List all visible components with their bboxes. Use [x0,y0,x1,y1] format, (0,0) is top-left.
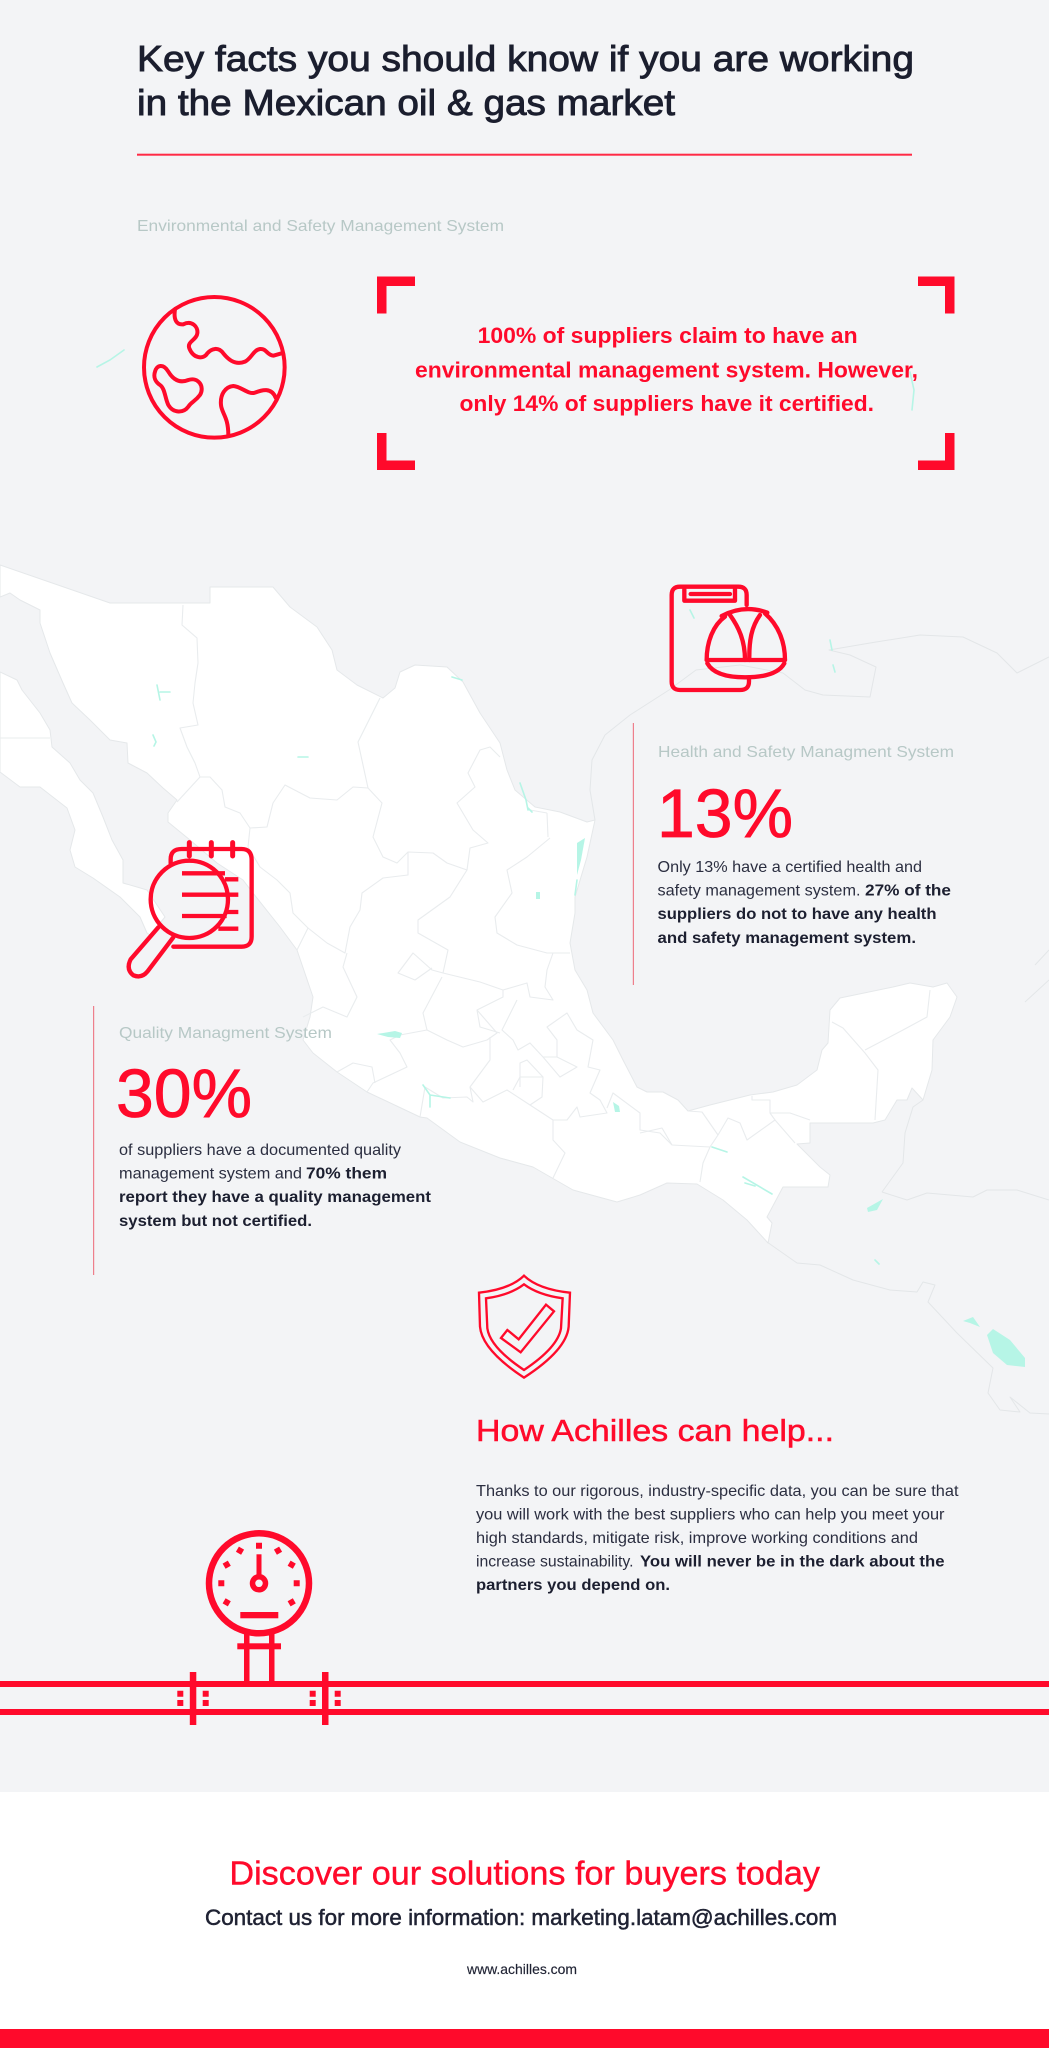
panel body: Only 13% have a certified health and [658,859,922,876]
text block: how achilles can help: increase sustainability. [476,1554,634,1570]
coastlines outside Mexico [590,635,1049,1414]
panel body [658,859,951,947]
panel body: and safety management system. [658,930,916,947]
panel label: Health and Safety Managment System [658,744,954,761]
panel body: management system and [119,1166,302,1182]
map of Mexico [0,350,1049,1414]
panel body: 70% them [306,1166,387,1182]
statistic 13%: 13% [657,775,793,852]
panel body [119,1142,432,1230]
callout text: 100% of suppliers claim to have an [478,323,858,348]
footer background [0,1792,1049,2029]
section label: environmental: Environmental and Safety Management System [137,218,504,235]
panel: quality [93,1006,432,1275]
callout text: environmental management system. However, [415,358,918,382]
icon: globe [144,297,285,438]
text block: how achilles can help: you will work with the best suppliers who can help you meet your [476,1506,945,1524]
footer contact: Contact us for more information: marketing.latam@achilles.com [205,1905,837,1930]
icon: notepad with magnifier [129,843,252,976]
gauge dial [209,1533,309,1633]
footer website: www.achilles.com [466,1961,577,1977]
title: Key facts you should know if you are working [137,38,914,79]
footer bar [0,2029,1049,2048]
text block: how achilles can help: You will never be in the dark about the [640,1554,945,1570]
panel body: suppliers do not to have any health [658,906,936,923]
panel body: of suppliers have a documented quality [119,1142,401,1159]
footer heading: Discover our solutions for buyers today [229,1854,821,1892]
icon: shield with check [479,1276,570,1378]
panel body: system but not certified. [119,1213,312,1230]
panel rule [633,723,634,985]
icon: pipeline with pressure gauge [0,1533,1049,1725]
title [137,38,914,123]
flanges [190,1672,196,1725]
panel body: safety management system. [658,882,860,900]
panel: footer [0,1792,1049,2048]
callout text: only 14% of suppliers have it certified. [460,391,874,416]
statistic 30%: 30% [116,1055,252,1132]
text block: how achilles can help: high standards, mitigate risk, improve working conditions and [476,1530,918,1547]
pipeline [0,1681,1049,1687]
panel label: Quality Managment System [119,1025,332,1042]
panel rule [93,1006,94,1275]
callout text [415,323,918,416]
title divider [137,154,912,156]
callout: environmental statistic [377,276,954,470]
title: in the Mexican oil & gas market [137,82,675,123]
heading: how achilles can help: How Achilles can help... [476,1414,834,1448]
text block: how achilles can help: partners you depend on. [476,1577,670,1594]
icon: clipboard with hard hat [672,587,785,690]
lakes and rivers [97,350,1025,1367]
panel: health and safety [633,723,954,985]
text block: how achilles can help: Thanks to our rigorous, industry-specific data, you can be sure that [476,1483,959,1500]
panel body: report they have a quality management [119,1189,432,1206]
text block: how achilles can help [476,1483,959,1594]
gauge stem [244,1632,250,1682]
panel body: 27% of the [865,882,951,900]
state borders [0,605,930,1182]
callout brackets [377,276,954,470]
